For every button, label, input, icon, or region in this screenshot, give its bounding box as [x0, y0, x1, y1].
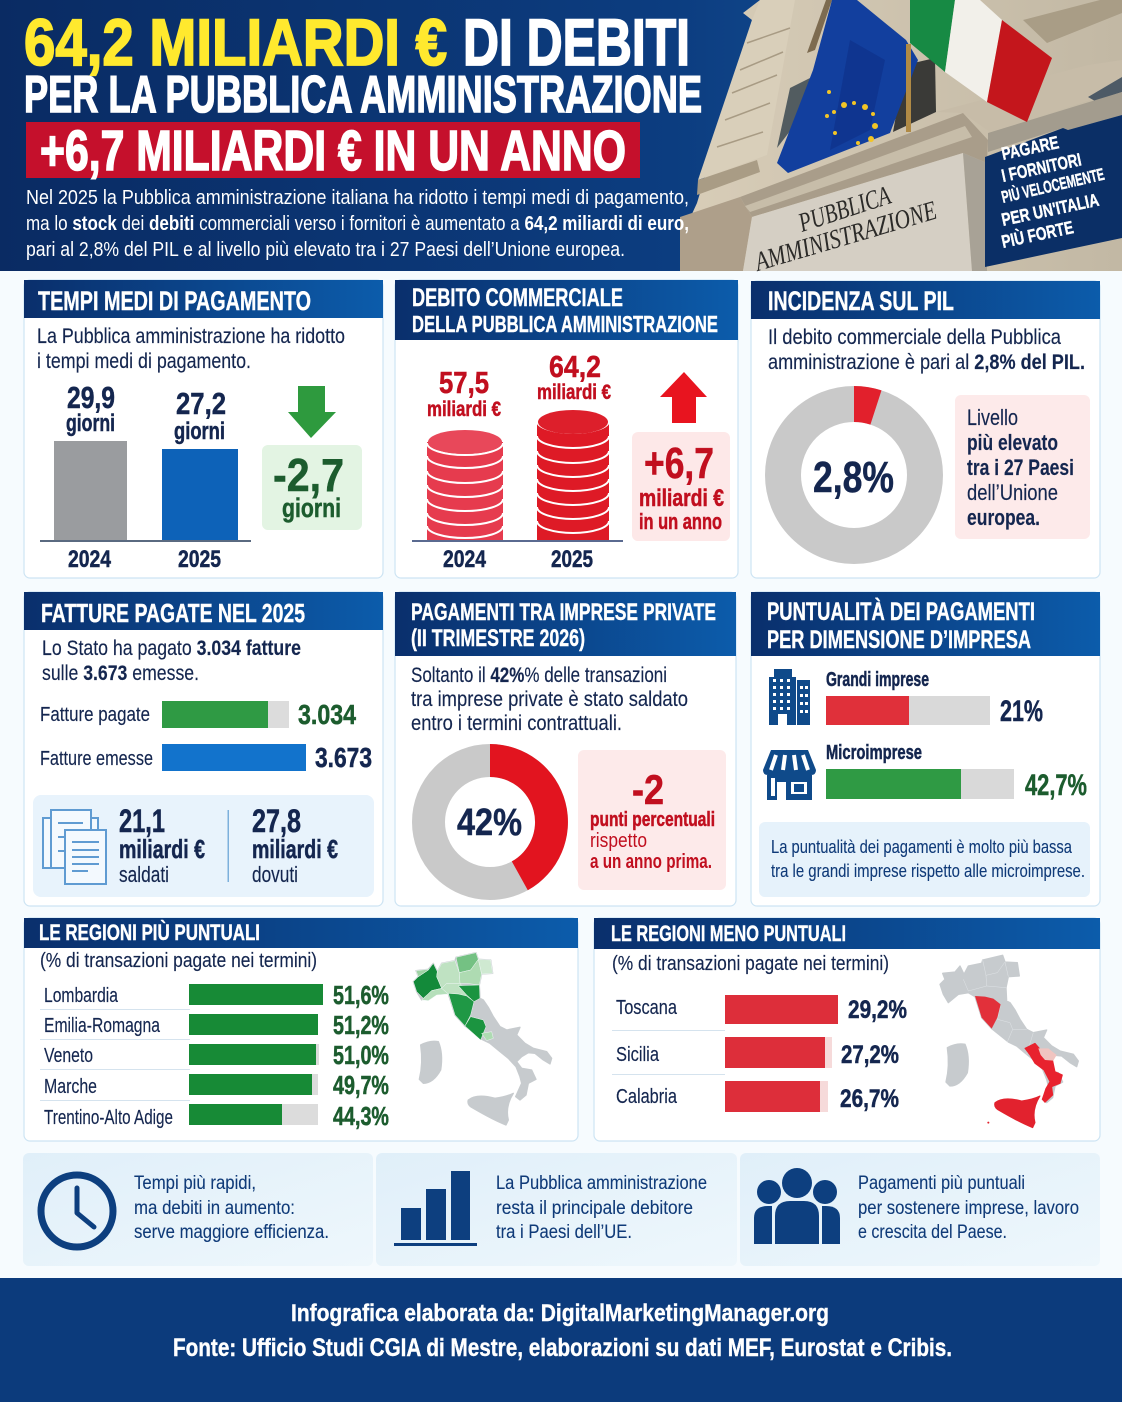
- stat: saldati: saldati: [119, 862, 169, 887]
- bar chart: giorni: 29,9: [67, 380, 115, 415]
- footer: [0, 1278, 1122, 1402]
- chart: coin stack 2024: 57,5: [439, 365, 489, 400]
- bar chart: regioni più puntuali: [40, 980, 389, 1131]
- callout: -2,7 giorni: -2,7: [273, 449, 344, 501]
- icon: clock: [41, 1175, 113, 1247]
- callout: +6,7 miliardi: +6,7: [644, 439, 714, 488]
- bar chart: regioni più puntuali: Veneto: [44, 1045, 93, 1067]
- panel: regioni più puntuali: [24, 918, 578, 1141]
- EU flag: [777, 0, 918, 173]
- callout: livello più elevato: tra i 27 Paesi: [967, 455, 1074, 480]
- panel: puntualità per dimensione d'impresa: [751, 592, 1100, 906]
- heading: PAGAMENTI TRA IMPRESE PRIVATE: [411, 599, 716, 626]
- text: efficienza: serve maggiore efficienza.: [134, 1222, 329, 1243]
- intro paragraph: [26, 187, 689, 261]
- stat: dovuti: dovuti: [252, 862, 298, 887]
- stat: saldati: miliardi €: [119, 834, 205, 864]
- bar: microimprese: [826, 742, 1087, 802]
- navy slogan sign: I FORNITORI: [1000, 150, 1083, 186]
- callout: +6,7 miliardi: [632, 432, 730, 541]
- chart: coin stack 2024: 2024: [443, 546, 487, 573]
- map: Italia, regioni più puntuali: [413, 953, 552, 1125]
- text: efficienza: Tempi più rapidi,: [134, 1173, 256, 1194]
- bar chart: regioni meno puntuali: Toscana: [616, 997, 678, 1019]
- callout: +6,7 miliardi: miliardi €: [639, 485, 724, 512]
- donut chart: 42%: [428, 744, 568, 890]
- intro paragraph: ma lo stock dei debiti commerciali verso i fornitori è aumentato a 64,2 miliardi di euro,: [26, 213, 689, 235]
- bar chart: regioni più puntuali: 51,2%: [333, 1010, 389, 1040]
- title: [24, 5, 702, 124]
- text: efficienza: ma debiti in aumento:: [134, 1198, 295, 1219]
- bar chart: regioni più puntuali: 44,3%: [333, 1101, 389, 1131]
- donut chart: 2,8%: 2,8%: [813, 453, 894, 502]
- callout: livello più elevato: europea.: [967, 505, 1040, 530]
- heading: DELLA PUBBLICA AMMINISTRAZIONE: [412, 311, 718, 337]
- bar: microimprese: 42,7%: [1025, 769, 1087, 802]
- subtitle: (% di transazioni pagate nei termini): [612, 953, 889, 975]
- callout: -2,7 giorni: [262, 445, 362, 530]
- heading: [751, 592, 1100, 656]
- heading: DEBITO COMMERCIALE: [412, 284, 623, 312]
- heading: INCIDENZA SUL PIL: [768, 286, 954, 316]
- icon: office building: [769, 669, 810, 725]
- arrow: increase: [660, 372, 707, 423]
- heading: TEMPI MEDI DI PAGAMENTO: [38, 286, 311, 316]
- donut chart: 2,8%: [783, 386, 925, 546]
- description: [411, 664, 688, 735]
- icon: documents: [43, 810, 106, 884]
- icon: people: [754, 1168, 840, 1244]
- bar: fatture emesse: [40, 742, 372, 773]
- heading: (II TRIMESTRE 2026): [411, 625, 585, 652]
- icon: bar chart: [394, 1171, 477, 1246]
- chart: coin stack 2024: [427, 365, 503, 573]
- description: amministrazione è pari al 2,8% del PIL.: [768, 351, 1085, 374]
- bar: microimprese: Microimprese: [826, 742, 922, 764]
- stat: saldati: 21,1: [119, 803, 165, 839]
- callout: -2,7 giorni: giorni: [282, 493, 341, 523]
- description: Il debito commerciale della Pubblica: [768, 326, 1061, 349]
- bar chart: regioni più puntuali: Lombardia: [44, 985, 119, 1007]
- takeaway: crescita: [740, 1153, 1100, 1266]
- intro paragraph: pari al 2,8% del PIL e al livello più elevato tra i 27 Paesi dell’Unione europea.: [26, 239, 625, 261]
- description: i tempi medi di pagamento.: [37, 350, 251, 373]
- heading: LE REGIONI MENO PUNTUALI: [611, 921, 846, 946]
- description: sulle 3.673 emesse.: [42, 662, 199, 685]
- bar chart: regioni più puntuali: 49,7%: [333, 1070, 389, 1100]
- title: DI DEBITI: [463, 5, 690, 79]
- heading: [751, 281, 1100, 319]
- stat: dovuti: [252, 803, 338, 887]
- bar: grandi imprese: 21%: [1000, 695, 1043, 728]
- callout: livello più elevato: Livello: [967, 405, 1018, 430]
- description: La Pubblica amministrazione ha ridotto: [37, 325, 345, 348]
- bar: grandi imprese: [826, 669, 1043, 728]
- bar chart: giorni: giorni: [174, 418, 225, 445]
- takeaway strip: [23, 1153, 1100, 1266]
- heading: [24, 918, 578, 948]
- text: debitore: tra i Paesi dell’UE.: [496, 1222, 632, 1243]
- text: debitore: [496, 1173, 707, 1243]
- chart: coin stack 2025: miliardi €: [537, 381, 611, 404]
- engraved building name: PUBBLICA: [794, 180, 895, 238]
- chart: coin stack 2025: 64,2: [549, 349, 601, 384]
- bar chart: giorni: 2024: [68, 546, 112, 573]
- description: tra imprese private è stato saldato: [411, 688, 688, 711]
- takeaway: efficienza: [23, 1153, 373, 1266]
- title: 64,2 MILIARDI €: [24, 5, 447, 79]
- heading: [594, 918, 1100, 949]
- bar chart: regioni più puntuali: Emilia-Romagna: [44, 1015, 161, 1037]
- bar chart: regioni più puntuali: 51,6%: [333, 980, 389, 1010]
- text: crescita: Pagamenti più puntuali: [858, 1173, 1025, 1194]
- icon: shop: [763, 750, 816, 800]
- map: Italia, regioni meno puntuali: [940, 955, 1078, 1128]
- heading: FATTURE PAGATE NEL 2025: [41, 598, 305, 628]
- bar chart: giorni: 27,2: [176, 386, 226, 421]
- description: [37, 325, 345, 373]
- heading: [395, 592, 736, 656]
- panel: fatture pagate: [24, 592, 383, 906]
- summary box: saldati e dovuti: [33, 795, 374, 897]
- bar chart: regioni più puntuali: Trentino-Alto Adige: [44, 1107, 173, 1129]
- callout: livello più elevato: [955, 395, 1090, 539]
- bar: grandi imprese: Grandi imprese: [826, 669, 929, 691]
- callout: -2 punti percentuali: [578, 750, 726, 890]
- source line: Fonte: Ufficio Studi CGIA di Mestre, elaborazioni su dati MEF, Eurostat e Cribis.: [173, 1334, 952, 1362]
- navy slogan sign: [985, 115, 1122, 267]
- note: [759, 822, 1090, 897]
- bar chart: giorni: giorni: [66, 410, 115, 437]
- bar: fatture pagate: [40, 699, 356, 730]
- header banner: [0, 0, 1122, 277]
- heading: LE REGIONI PIÙ PUNTUALI: [39, 920, 260, 945]
- panel: incidenza sul PIL: [751, 281, 1100, 578]
- Italian flag: [910, 0, 1052, 122]
- bar: fatture emesse: Fatture emesse: [40, 748, 153, 770]
- stat: saldati: [119, 803, 205, 887]
- stat: dovuti: 27,8: [252, 803, 301, 839]
- callout: livello più elevato: più elevato: [967, 430, 1058, 455]
- panel: debito commerciale: [395, 280, 738, 578]
- bar chart: regioni più puntuali: Marche: [44, 1076, 97, 1098]
- stat: dovuti: miliardi €: [252, 834, 338, 864]
- navy slogan sign: PAGARE: [1000, 132, 1061, 164]
- bar chart: regioni più puntuali: 51,0%: [333, 1040, 389, 1070]
- bar chart: regioni meno puntuali: [612, 995, 907, 1113]
- text: debitore: La Pubblica amministrazione: [496, 1173, 707, 1194]
- text: efficienza: [134, 1173, 329, 1243]
- description: Soltanto il 42%% delle transazioni: [411, 664, 667, 687]
- arrow: decrease: [288, 386, 336, 438]
- bar chart: regioni meno puntuali: Calabria: [616, 1086, 678, 1108]
- donut chart: 42%: 42%: [457, 802, 522, 844]
- bar chart: regioni meno puntuali: 29,2%: [848, 996, 907, 1024]
- title: PER LA PUBBLICA AMMINISTRAZIONE: [24, 66, 702, 124]
- text: crescita: per sostenere imprese, lavoro: [858, 1198, 1079, 1219]
- heading: [395, 280, 738, 340]
- chart: coin stack 2024: miliardi €: [427, 398, 501, 421]
- callout: livello più elevato: dell’Unione: [967, 480, 1058, 505]
- callout: -2 punti percentuali: -2: [632, 766, 664, 813]
- intro paragraph: Nel 2025 la Pubblica amministrazione italiana ha ridotto i tempi medi di pagamento,: [26, 187, 689, 209]
- description: entro i termini contrattuali.: [411, 712, 622, 735]
- description: Lo Stato ha pagato 3.034 fatture: [42, 637, 301, 660]
- bar chart: giorni: 2025: [178, 546, 221, 573]
- text: crescita: e crescita del Paese.: [858, 1222, 1007, 1243]
- bar: fatture pagate: Fatture pagate: [40, 704, 150, 726]
- panel: pagamenti tra imprese private: [395, 592, 736, 906]
- bar chart: regioni meno puntuali: 27,2%: [841, 1041, 899, 1069]
- panel: tempi medi di pagamento: [24, 280, 383, 578]
- text: debitore: resta il principale debitore: [496, 1198, 693, 1219]
- callout: +6,7 miliardi: in un anno: [639, 509, 722, 534]
- red headline band: +6,7 MILIARDI € IN UN ANNO: [40, 119, 626, 183]
- bar chart: giorni: [40, 380, 251, 573]
- chart: coin stack 2025: [537, 349, 611, 573]
- photo: ministry building with flags: [680, 0, 1122, 271]
- callout: -2 punti percentuali: a un anno prima.: [590, 851, 712, 873]
- chart: coin stack 2025: 2025: [551, 546, 593, 573]
- takeaway: debitore: [376, 1153, 737, 1266]
- credit line: Infografica elaborata da: DigitalMarketingManager.org: [291, 1300, 829, 1327]
- navy slogan sign: PIÙ FORTE: [999, 216, 1075, 252]
- callout: -2 punti percentuali: punti percentuali: [590, 809, 715, 831]
- panel: regioni meno puntuali: [594, 918, 1100, 1141]
- bar chart: regioni meno puntuali: Sicilia: [616, 1044, 660, 1066]
- subtitle: (% di transazioni pagate nei termini): [40, 950, 317, 972]
- description: [768, 326, 1085, 374]
- heading: PUNTUALITÀ DEI PAGAMENTI: [767, 597, 1035, 626]
- bar: fatture emesse: 3.673: [315, 742, 372, 773]
- engraved building name: AMMINISTRAZIONE: [750, 195, 940, 277]
- text: crescita: [858, 1173, 1079, 1243]
- description: [42, 637, 301, 685]
- bar: fatture pagate: 3.034: [298, 699, 356, 730]
- heading: PER DIMENSIONE D’IMPRESA: [767, 626, 1031, 654]
- flagpole: [906, 44, 911, 132]
- bar chart: regioni meno puntuali: 26,7%: [840, 1085, 899, 1113]
- callout: -2 punti percentuali: rispetto: [590, 830, 647, 852]
